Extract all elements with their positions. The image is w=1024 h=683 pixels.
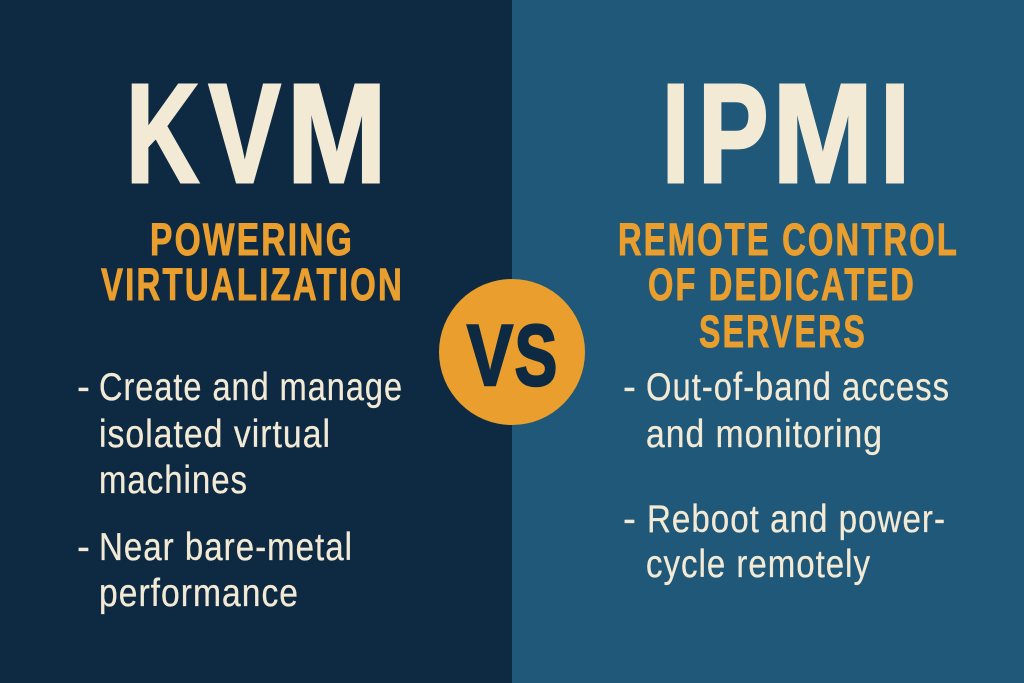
- subheading: powering virtualization: POWERING: [150, 214, 354, 265]
- bullet: out-of-band access and monitoring: [623, 366, 950, 456]
- bullet: reboot and power-cycle remotely: -: [623, 498, 637, 541]
- bullet: near bare-metal performance: performance: [99, 572, 299, 615]
- bullet: reboot and power-cycle remotely: [623, 498, 946, 586]
- title: KVM: K: [126, 54, 199, 212]
- bullet: out-of-band access and monitoring: Out-of-band access: [646, 366, 950, 409]
- bullet: create and manage isolated virtual machines: Create and manage: [99, 366, 403, 409]
- bullet: near bare-metal performance: -: [77, 526, 91, 569]
- subheading: remote control of dedicated servers: [618, 214, 959, 357]
- bullet: out-of-band access and monitoring: and monitoring: [646, 413, 883, 456]
- subheading: powering virtualization: [101, 214, 404, 310]
- bullet: reboot and power-cycle remotely: cycle remotely: [646, 543, 871, 586]
- title: IPMI: [662, 54, 910, 212]
- badge: VS: V: [467, 308, 513, 404]
- panel: KVM: [0, 0, 512, 683]
- bullet: create and manage isolated virtual machines: isolated virtual: [99, 413, 331, 456]
- bullet: out-of-band access and monitoring: -: [623, 366, 637, 409]
- title: KVM: [126, 54, 386, 212]
- badge: VS: [439, 279, 585, 425]
- panel: IPMI: [512, 0, 1024, 683]
- bullet: create and manage isolated virtual machines: -: [77, 366, 91, 409]
- title: KVM: M: [287, 54, 386, 212]
- subheading: remote control of dedicated servers: SERVERS: [699, 306, 867, 357]
- bullet: near bare-metal performance: [77, 526, 353, 615]
- bullet: near bare-metal performance: Near bare-metal: [99, 526, 353, 569]
- title: IPMI: I: [662, 54, 690, 212]
- subheading: powering virtualization: VIRTUALIZATION: [101, 259, 404, 310]
- title: IPMI: M: [772, 54, 873, 212]
- bullet: create and manage isolated virtual machines: machines: [99, 459, 248, 502]
- badge: VS: S: [515, 308, 557, 404]
- bullet: reboot and power-cycle remotely: Reboot and power-: [647, 498, 946, 541]
- subheading: remote control of dedicated servers: OF DEDICATED: [648, 259, 916, 310]
- title: IPMI: I: [880, 54, 910, 212]
- bullet: create and manage isolated virtual machines: [77, 366, 403, 502]
- title: IPMI: P: [698, 54, 768, 212]
- title: KVM: V: [209, 54, 281, 212]
